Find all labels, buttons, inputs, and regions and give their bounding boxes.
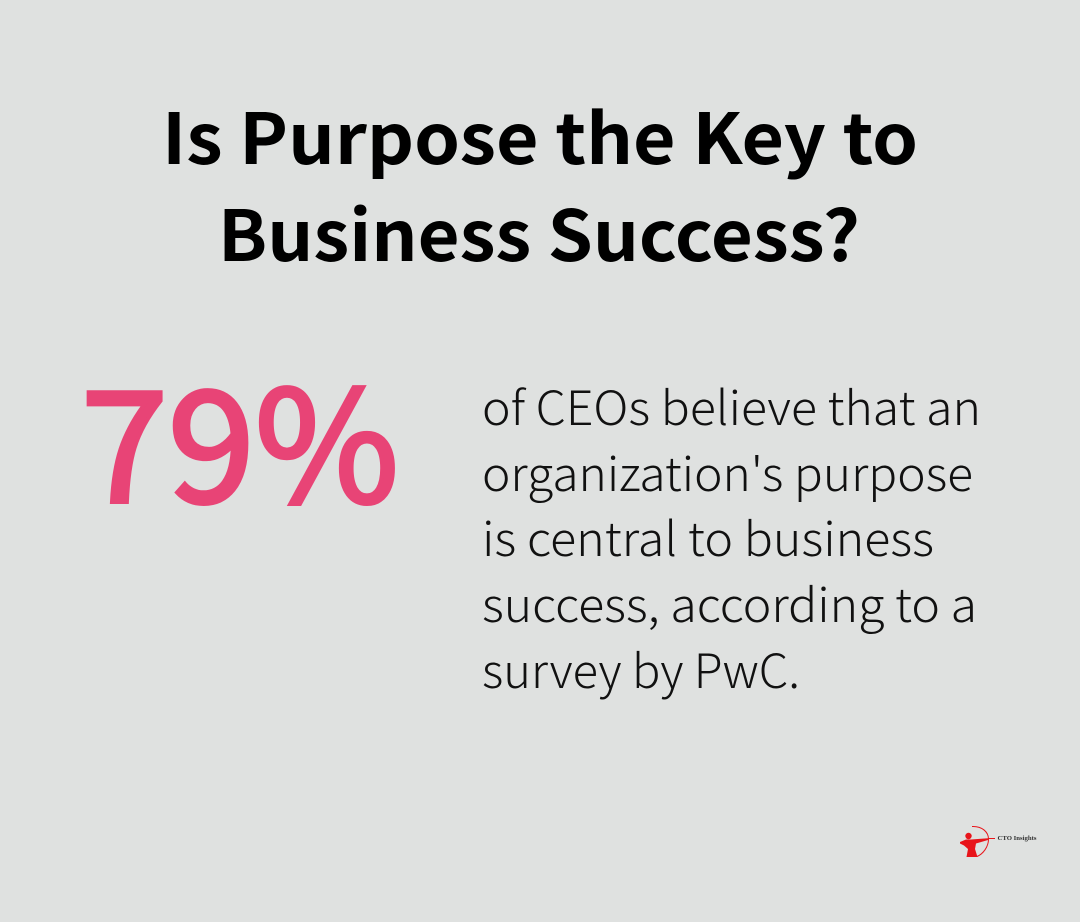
description text: organization's purpose (482, 436, 973, 505)
logo text: CTO Insights (998, 835, 1037, 842)
title: Is Purpose the Key to (162, 84, 918, 185)
logo: CTO Insights archer (960, 826, 1037, 857)
title: Business Success? (218, 181, 860, 282)
description text (482, 370, 981, 702)
description text: success, according to a (482, 567, 977, 636)
big statistic: 79%: 79% (81, 324, 399, 547)
icon: archer with bow (960, 826, 995, 857)
description text: is central to business (482, 501, 934, 570)
description text: survey by PwC. (482, 633, 800, 702)
title (162, 84, 918, 282)
description text: of CEOs believe that an (482, 370, 981, 439)
